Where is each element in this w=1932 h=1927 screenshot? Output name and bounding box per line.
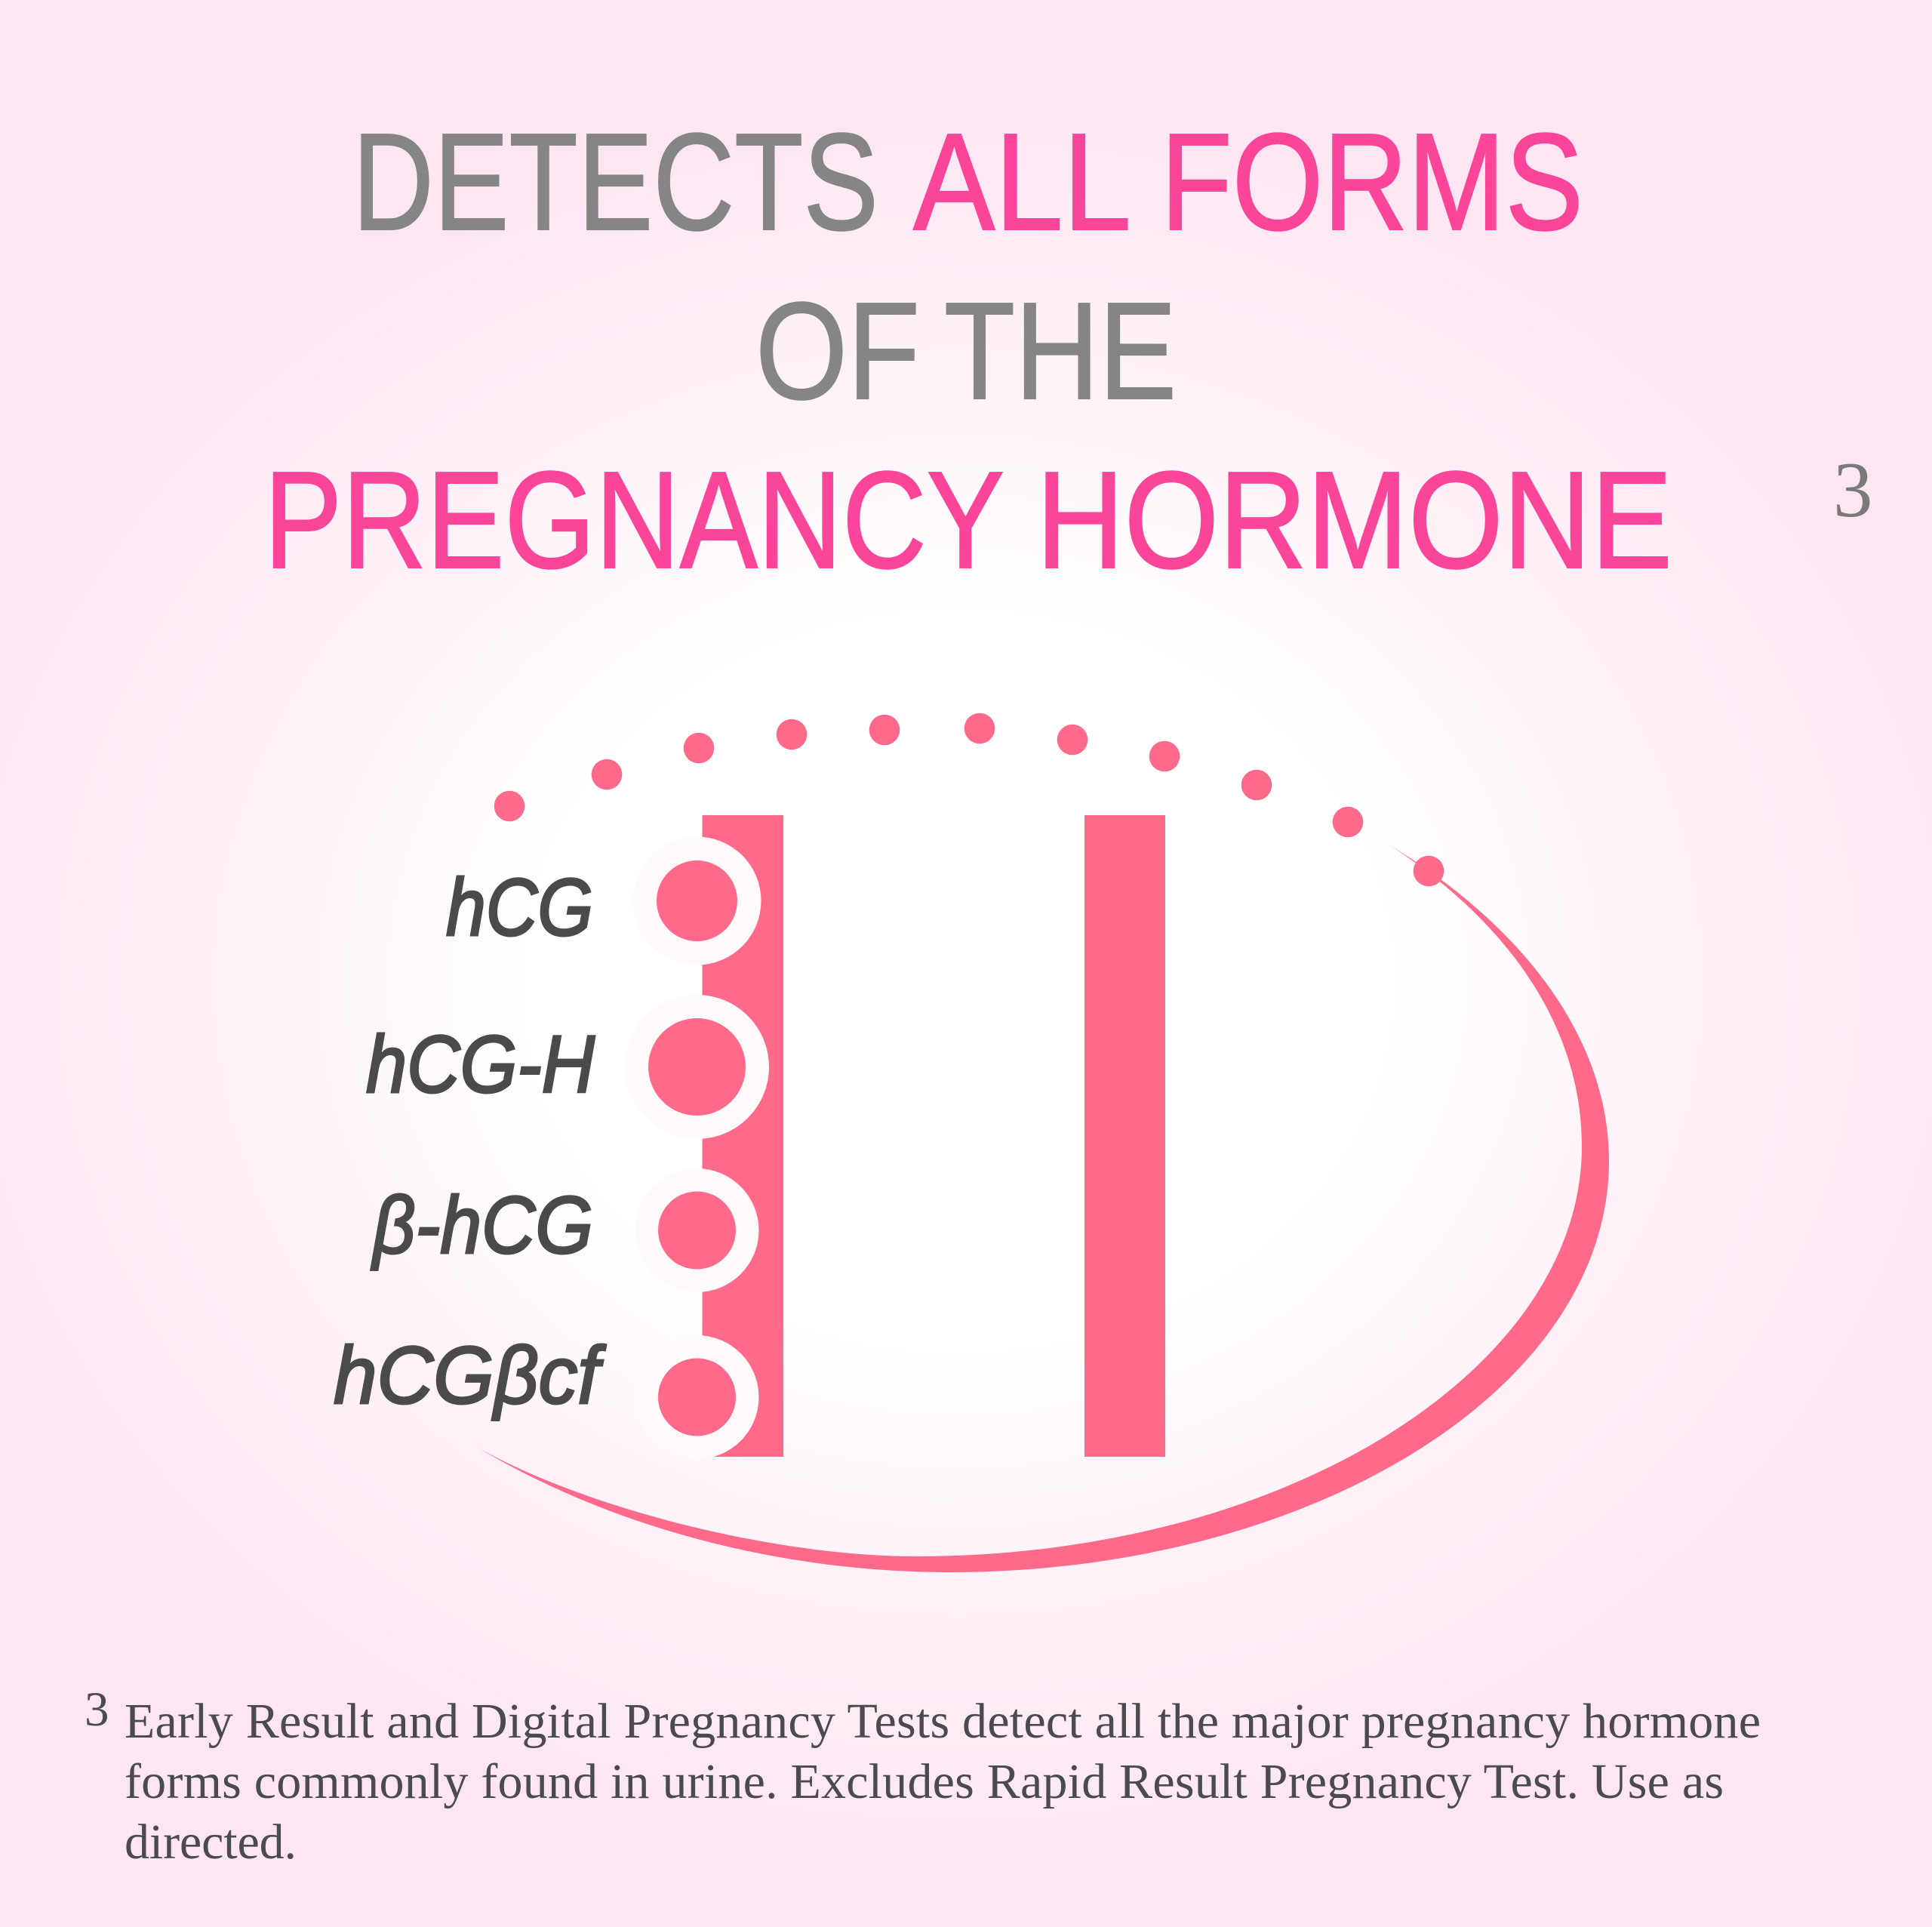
title: ALL — [913, 104, 1131, 259]
title footnote marker: 3 — [1833, 445, 1873, 534]
footnote — [85, 1682, 1761, 1870]
title: OF — [755, 273, 920, 428]
footnote: 3 — [85, 1682, 109, 1737]
footnote: directed. — [125, 1815, 297, 1870]
hormone labels: hCGβcf — [334, 1329, 607, 1421]
dotted arc — [494, 713, 1444, 886]
hormone labels: β-hCG — [371, 1179, 593, 1270]
hormone labels: hCG-H — [366, 1018, 595, 1110]
hormone marker: hCG-H — [625, 995, 769, 1139]
test line: left bar — [702, 815, 783, 1457]
hormone labels — [334, 861, 607, 1421]
swoosh curve — [478, 845, 1609, 1572]
test line: right bar — [1084, 815, 1165, 1457]
title: THE — [944, 273, 1177, 428]
footnote: Early Result and Digital Pregnancy Tests detect all the major pregnancy hormone — [125, 1694, 1761, 1749]
title: PREGNANCY — [264, 442, 1004, 597]
title: FORMS — [1161, 104, 1583, 259]
hormone labels: hCG — [446, 861, 593, 953]
title — [264, 104, 1672, 597]
footnote: forms commonly found in urine. Excludes Rapid Result Pregnancy Test. Use as — [125, 1754, 1724, 1809]
hormone marker: hCG beta core fragment — [635, 1335, 759, 1459]
hormone marker: beta-hCG — [635, 1168, 759, 1292]
hormone marker: hCG — [632, 836, 761, 965]
title: HORMONE — [1036, 442, 1672, 597]
title: DETECTS — [352, 104, 878, 259]
